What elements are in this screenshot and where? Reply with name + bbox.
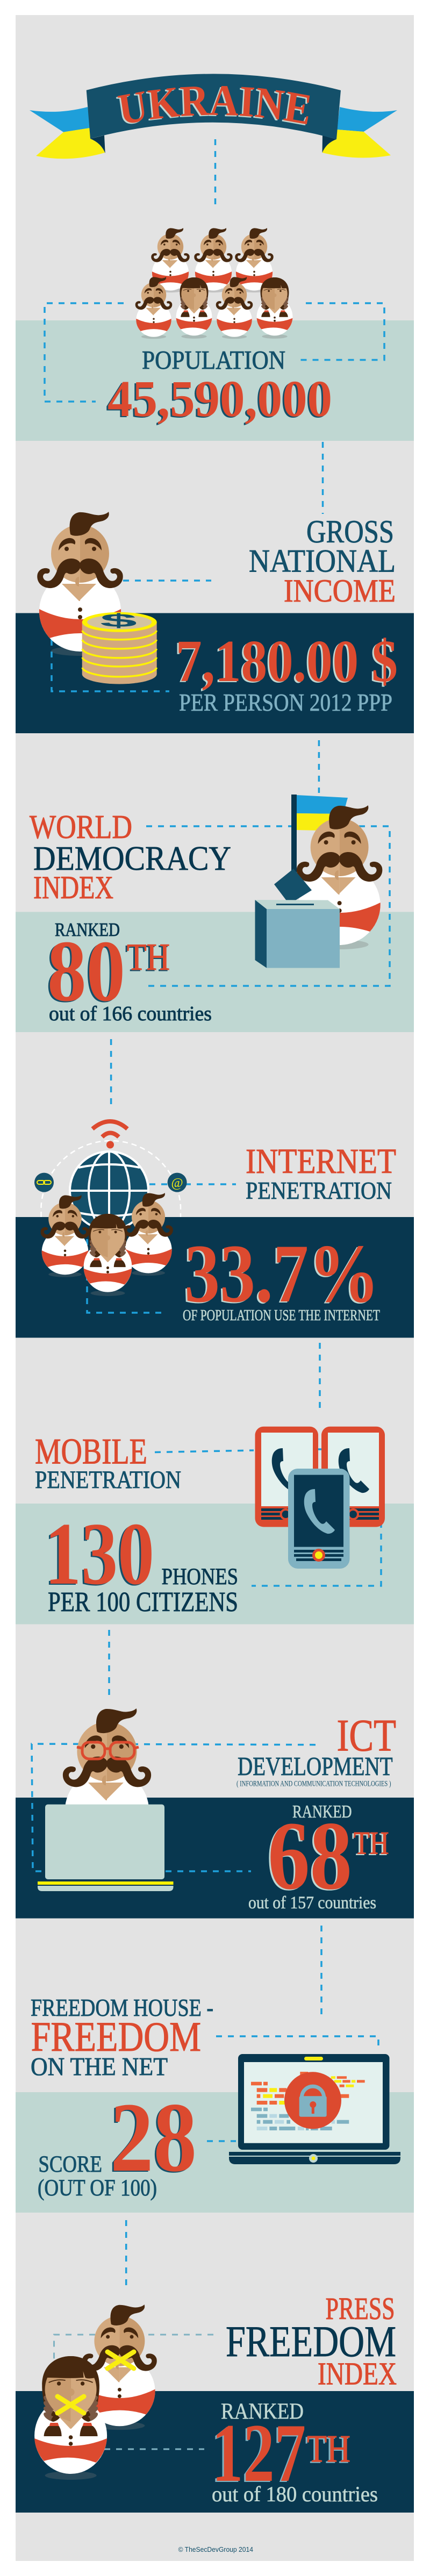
connector: title to population — [214, 139, 216, 210]
number: 130: 130 — [45, 1504, 154, 1603]
connector: to mobile — [319, 1343, 321, 1413]
heading: freedom house freedom on the net: FREEDOM HOUSE - — [31, 1994, 213, 2021]
heading: ict development: DEVELOPMENT — [238, 1751, 393, 1781]
heading: mobile penetration: MOBILE — [35, 1431, 147, 1472]
panel: freedom on the net band — [16, 2092, 414, 2213]
caption: income: PER PERSON 2012 PPP — [179, 689, 392, 716]
heading: world democracy index: WORLD — [30, 809, 132, 846]
heading: ict development — [236, 1711, 396, 1788]
icon: man with glasses — [63, 1708, 151, 1857]
panel: ict band — [16, 1798, 414, 1919]
banner body — [87, 74, 341, 139]
icon: coins — [82, 611, 157, 684]
coin dollar sign: $ — [100, 611, 137, 631]
caption: out of 180 countries: out of 180 countries — [212, 2482, 378, 2506]
icon: right phone — [321, 1427, 385, 1527]
ribbon tails — [30, 107, 397, 159]
number: 28: 28 — [110, 2083, 197, 2193]
number: 33.7%: 33.7% — [184, 1227, 379, 1320]
heading: world democracy index — [30, 809, 231, 905]
connector: income — [52, 581, 211, 691]
heading: press freedom index: PRESS — [326, 2291, 395, 2326]
icon: laptop — [38, 1805, 173, 1891]
heading: gross national income: GROSS — [306, 514, 394, 549]
icon: silenced man — [82, 2305, 157, 2430]
panel: internet band — [16, 1217, 414, 1337]
number: rank 127th: 127 — [212, 2407, 306, 2499]
icon: man — [37, 512, 123, 656]
icon: link — [34, 1173, 54, 1192]
icon: left phone — [255, 1427, 318, 1527]
heading: freedom house freedom on the net: ON THE NET — [31, 2053, 168, 2081]
lock — [284, 2072, 341, 2129]
number: income: 7,180.00 $ — [176, 628, 398, 695]
connector: to internet — [110, 1039, 112, 1108]
connector: freedom on the net — [207, 2036, 378, 2141]
label: ranked: RANKED — [55, 919, 120, 940]
caption: phones: PHONES — [162, 1564, 238, 1590]
icon: ballot box — [255, 869, 340, 968]
icon: wifi — [92, 1121, 127, 1148]
icon: flag — [291, 795, 348, 875]
label: ranked: RANKED — [221, 2400, 304, 2424]
heading: gross national income: NATIONAL — [249, 543, 396, 578]
heading: internet penetration — [246, 1142, 396, 1204]
laptop base — [229, 2152, 400, 2156]
number: population: 45,590,000 — [108, 370, 332, 427]
connector: to income — [322, 442, 324, 514]
heading: mobile penetration: PENETRATION — [35, 1466, 181, 1494]
panel: democracy band — [16, 912, 414, 1032]
heading: press freedom index: INDEX — [318, 2356, 397, 2392]
icon: at sign: @ — [171, 1176, 183, 1190]
caption: out of 166 countries: out of 166 countries — [49, 1003, 212, 1025]
number: rank 80th: TH — [127, 936, 170, 978]
label: score: SCORE — [38, 2152, 102, 2177]
banner title: UKRAINE — [116, 86, 310, 126]
heading: world democracy index: INDEX — [33, 870, 113, 905]
heading: internet penetration: INTERNET — [246, 1142, 396, 1181]
heading: gross national income — [249, 514, 396, 609]
heading: world democracy index: DEMOCRACY — [33, 839, 231, 877]
panel: press freedom band — [16, 2391, 414, 2513]
panel: income band — [16, 613, 414, 733]
number: rank 80th: 80 — [47, 923, 125, 1020]
connector: to democracy — [318, 740, 320, 793]
heading: gross national income: INCOME — [284, 573, 396, 609]
connector: to press freedom — [125, 2220, 127, 2291]
heading: freedom house freedom on the net: FREEDOM — [31, 2013, 201, 2060]
icon: people — [41, 1193, 173, 1296]
icon: globe — [70, 1151, 148, 1230]
caption: out of 100: (OUT OF 100) — [38, 2176, 157, 2201]
title banner — [30, 74, 397, 159]
heading: ict development: ICT — [336, 1711, 396, 1761]
connector: population — [45, 303, 384, 402]
code lines — [251, 2072, 365, 2105]
connector: to ict — [108, 1630, 110, 1700]
heading: mobile penetration — [35, 1431, 181, 1494]
heading: press freedom index — [226, 2291, 397, 2392]
panel: population band — [16, 320, 414, 441]
icon: laptop with lock — [229, 2054, 400, 2164]
glasses — [77, 1742, 139, 1759]
icon: silenced woman — [34, 2356, 107, 2480]
caption: per 100 citizens: PER 100 CITIZENS — [48, 1587, 238, 1618]
icon: man voting — [297, 805, 382, 949]
connector: democracy — [145, 826, 390, 986]
connector: mobile — [155, 1449, 381, 1586]
heading: freedom house freedom on the net — [31, 1994, 213, 2081]
heading: internet penetration: PENETRATION — [246, 1177, 392, 1204]
panel: mobile band — [16, 1504, 414, 1625]
connector: ict — [32, 1744, 316, 1871]
footer credit: © TheSecDevGroup 2014 — [178, 2546, 253, 2553]
icon: front phone — [288, 1469, 349, 1569]
number: rank 68th: 68 — [268, 1802, 352, 1910]
icon: group of people — [135, 228, 292, 339]
connector: to freedom net — [320, 1926, 322, 2019]
number: rank 68th: TH — [354, 1826, 389, 1861]
connector: internet — [87, 1184, 236, 1313]
caption: out of 157 countries: out of 157 countries — [248, 1893, 376, 1913]
connector: press freedom — [54, 2335, 213, 2449]
label: ranked: RANKED — [292, 1802, 352, 1822]
icon: at sign — [168, 1173, 187, 1192]
decorative orbit — [41, 1141, 181, 1217]
number: rank 127th: TH — [307, 2427, 350, 2470]
heading: population: POPULATION — [142, 345, 285, 375]
